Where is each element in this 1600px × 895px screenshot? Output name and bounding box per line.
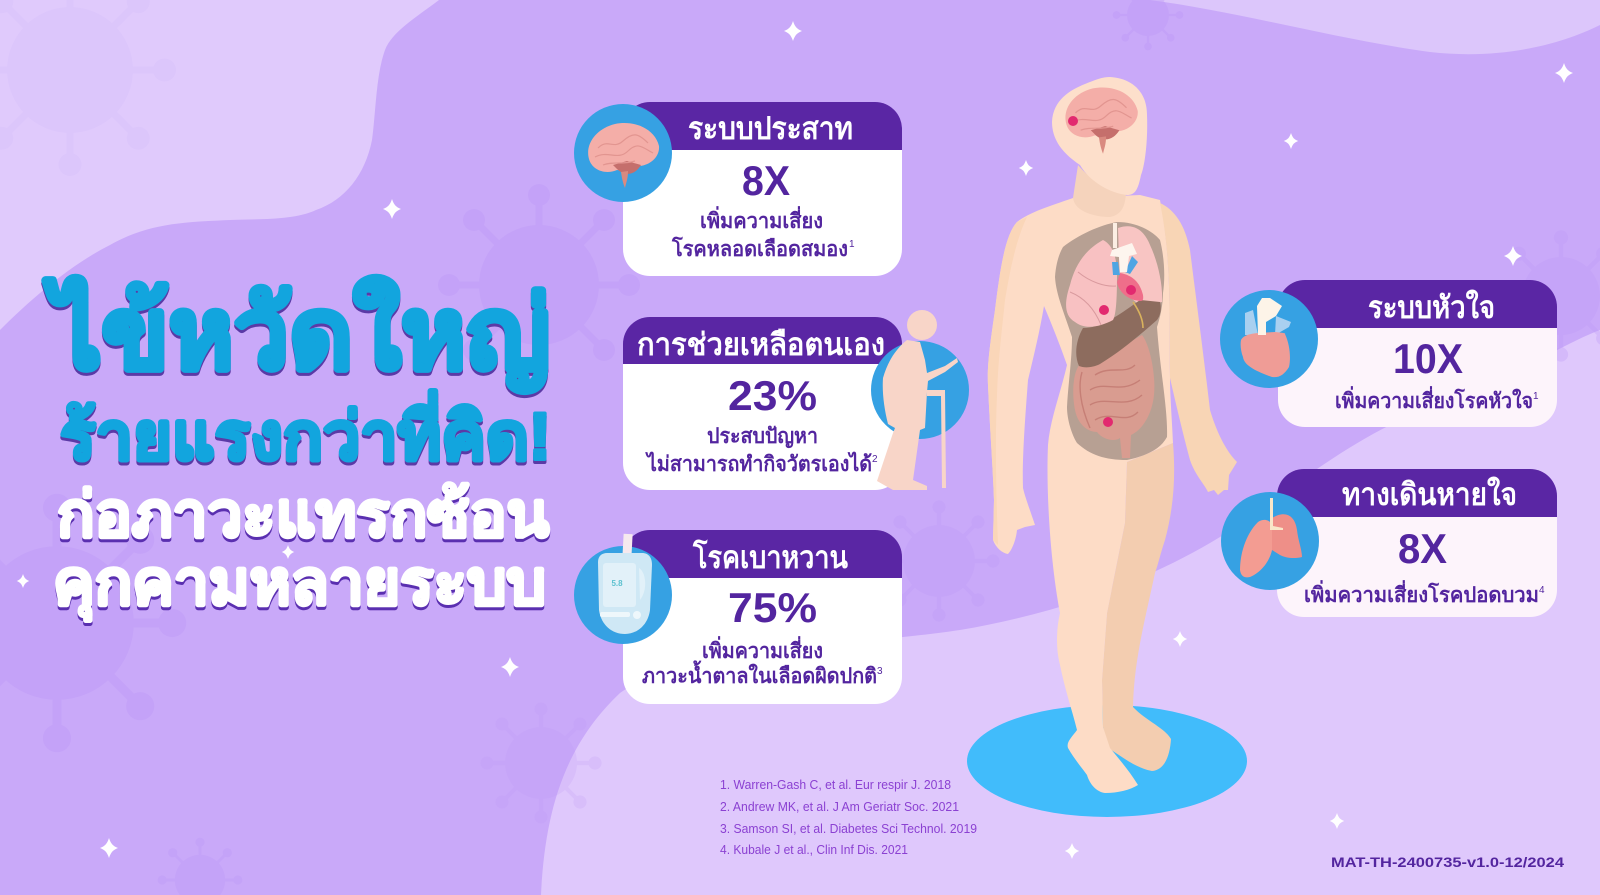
icon: heart — [1241, 298, 1291, 377]
references — [720, 778, 977, 857]
body: torso, arm and front leg — [988, 195, 1173, 793]
icon: brain — [588, 123, 659, 188]
references: 1. Warren-Gash C, et al. Eur respir J. 2018 — [720, 778, 951, 792]
body: organ cavity — [1055, 222, 1167, 460]
background: top-left blob — [0, 0, 439, 330]
body: left arm shade — [988, 217, 1027, 545]
panel: diabetes: 75% — [728, 584, 817, 631]
body: brain — [1065, 87, 1138, 154]
document code: MAT-TH-2400735-v1.0-12/2024 — [1331, 854, 1564, 870]
panel: nervous system: โรคหลอดเลือดสมอง — [671, 236, 848, 261]
title: คุกคามหลายระบบ — [53, 549, 546, 621]
title: ไข้หวัดใหญ่ — [43, 276, 550, 393]
panel: self care — [623, 310, 969, 490]
body: head — [1052, 77, 1147, 195]
panel: respiratory — [1221, 469, 1557, 617]
panel: diabetes: 3 — [877, 666, 883, 677]
panel: nervous system: ระบบประสาท — [688, 111, 853, 146]
panel: nervous system: เพิ่มความเสี่ยง — [700, 205, 823, 233]
body: liver — [1076, 300, 1161, 367]
body: marker dots — [1068, 116, 1136, 427]
panel: diabetes — [574, 530, 902, 704]
panel: self care: การช่วยเหลือตนเอง — [637, 327, 885, 362]
body: right lung — [1118, 226, 1162, 305]
body figure — [988, 77, 1237, 793]
references: 3. Samson SI, et al. Diabetes Sci Technol. 2019 — [720, 822, 977, 836]
panel: self care: ไม่สามารถทำกิจวัตรเองได้ — [645, 451, 872, 476]
background: bottom-right blob — [541, 330, 1600, 895]
panel: diabetes: โรคเบาหวาน — [692, 539, 848, 575]
panel: cardiovascular: เพิ่มความเสี่ยงโรคหัวใจ — [1335, 385, 1533, 413]
panel: cardiovascular: ระบบหัวใจ — [1368, 289, 1495, 325]
panel: respiratory: 8X — [1398, 525, 1447, 572]
references: 2. Andrew MK, et al. J Am Geriatr Soc. 2021 — [720, 800, 959, 814]
body: intestines — [1073, 335, 1154, 458]
body: left lung — [1066, 240, 1117, 327]
background: top-right blob — [1150, 0, 1600, 54]
body: rear leg shade — [1102, 443, 1174, 771]
title: ร้ายแรงกว่าที่คิด! — [60, 389, 551, 473]
title — [43, 276, 551, 621]
panel: self care: ประสบปัญหา — [707, 425, 818, 449]
icon: glucose meter: 5.8 — [611, 579, 623, 588]
body: heart — [1117, 273, 1143, 301]
panel: self care: 2 — [872, 454, 878, 465]
panel: nervous system — [574, 102, 902, 276]
icon: glucose meter — [598, 534, 652, 634]
icon: lungs — [1240, 498, 1302, 577]
ground ellipse — [967, 705, 1247, 817]
panel: self care: 23% — [728, 372, 817, 419]
title: ก่อภาวะแทรกซ้อน — [57, 481, 549, 550]
panel: cardiovascular: 10X — [1393, 335, 1463, 382]
body: right arm — [1160, 203, 1237, 495]
panel: nervous system: 1 — [849, 239, 855, 250]
panel: diabetes: เพิ่มความเสี่ยง — [702, 635, 823, 663]
references: 4. Kubale J et al., Clin Inf Dis. 2021 — [720, 843, 908, 857]
panel: nervous system: 8X — [742, 157, 790, 204]
panel: cardiovascular: 1 — [1533, 391, 1539, 402]
panel: cardiovascular — [1220, 280, 1557, 427]
panel: respiratory: ทางเดินหายใจ — [1342, 476, 1517, 512]
panel: diabetes: ภาวะน้ำตาลในเลือดผิดปกติ — [642, 660, 877, 688]
icon: elderly person with cane — [877, 310, 958, 490]
body: neck shade — [1073, 165, 1126, 217]
panel: respiratory: เพิ่มความเสี่ยงโรคปอดบวม — [1304, 579, 1539, 607]
panel: respiratory: 4 — [1539, 585, 1545, 596]
